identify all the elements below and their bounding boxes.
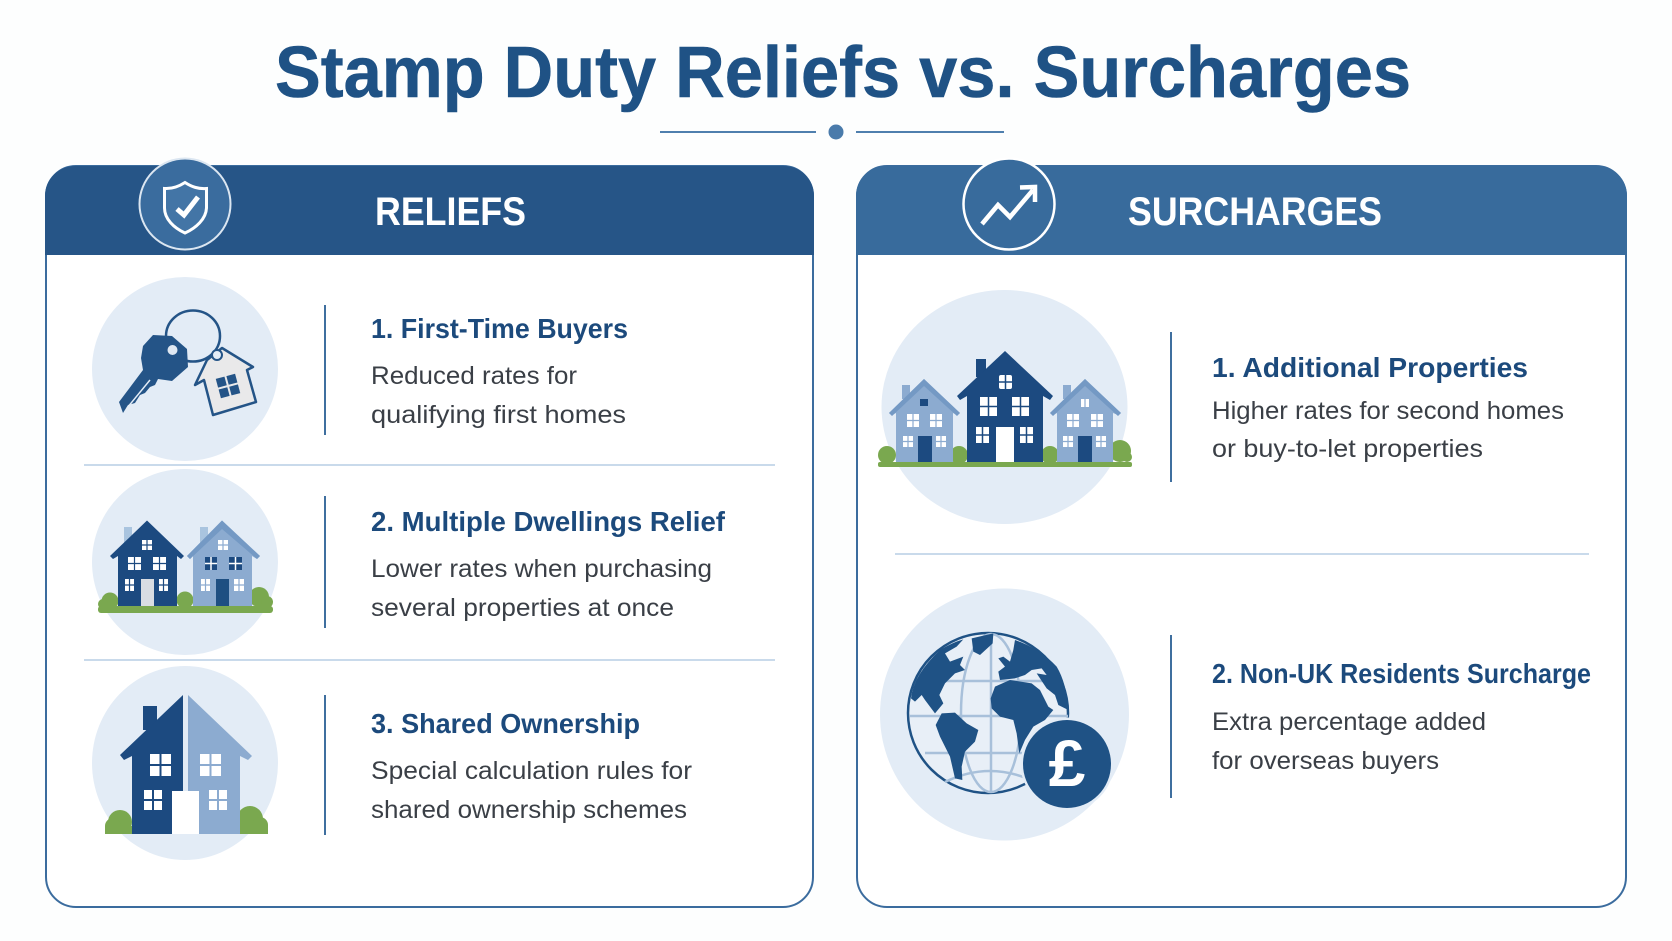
icon: split shared house xyxy=(92,666,278,860)
surcharges heading: SURCHARGES xyxy=(1128,190,1382,234)
south america xyxy=(936,713,978,780)
reliefs heading: RELIEFS xyxy=(375,190,526,234)
item heading: 1. Additional Properties xyxy=(1212,352,1528,383)
greenland xyxy=(972,633,993,655)
eurasia xyxy=(998,640,1068,710)
item: non-UK residents surcharge xyxy=(880,588,1591,840)
item description: Higher rates for second homes xyxy=(1212,397,1564,425)
panel: reliefs xyxy=(45,158,814,907)
icon: key with house tag xyxy=(92,277,278,461)
africa xyxy=(991,680,1053,753)
item description xyxy=(1212,397,1564,463)
item description: or buy-to-let properties xyxy=(1212,435,1483,463)
item heading: 3. Shared Ownership xyxy=(371,708,640,739)
item description: Special calculation rules for xyxy=(371,757,692,785)
item heading: 1. First-Time Buyers xyxy=(371,313,628,344)
icon: two houses xyxy=(92,469,278,655)
item description: Extra percentage added xyxy=(1212,708,1486,736)
item description: several properties at once xyxy=(371,594,674,622)
title: Stamp Duty Reliefs vs. Surcharges xyxy=(275,33,1411,113)
icon: three houses xyxy=(878,290,1132,524)
item description: Lower rates when purchasing xyxy=(371,555,712,583)
surcharges header band xyxy=(856,166,1627,255)
item description: shared ownership schemes xyxy=(371,796,687,824)
item description xyxy=(371,362,626,429)
reliefs header band xyxy=(45,166,814,255)
item description xyxy=(371,757,692,824)
panel: surcharges xyxy=(856,158,1627,907)
title divider xyxy=(660,124,1004,140)
item description: qualifying first homes xyxy=(371,401,626,429)
item description: Reduced rates for xyxy=(371,362,577,390)
pound coin: £ xyxy=(1049,726,1086,800)
item heading: 2. Multiple Dwellings Relief xyxy=(371,506,726,537)
icon: shield with check xyxy=(140,158,230,250)
item: first-time buyers xyxy=(92,277,628,461)
item: shared ownership xyxy=(92,666,692,860)
icon: globe with pound coin xyxy=(880,588,1129,840)
item description xyxy=(371,555,712,622)
item heading: 2. Non-UK Residents Surcharge xyxy=(1212,658,1591,689)
item: additional properties xyxy=(878,290,1564,524)
pound coin xyxy=(1020,718,1114,810)
icon: rising arrow xyxy=(964,158,1054,250)
item description xyxy=(1212,708,1486,775)
item: multiple dwellings relief xyxy=(92,469,726,655)
north america xyxy=(911,639,965,713)
item description: for overseas buyers xyxy=(1212,747,1439,775)
